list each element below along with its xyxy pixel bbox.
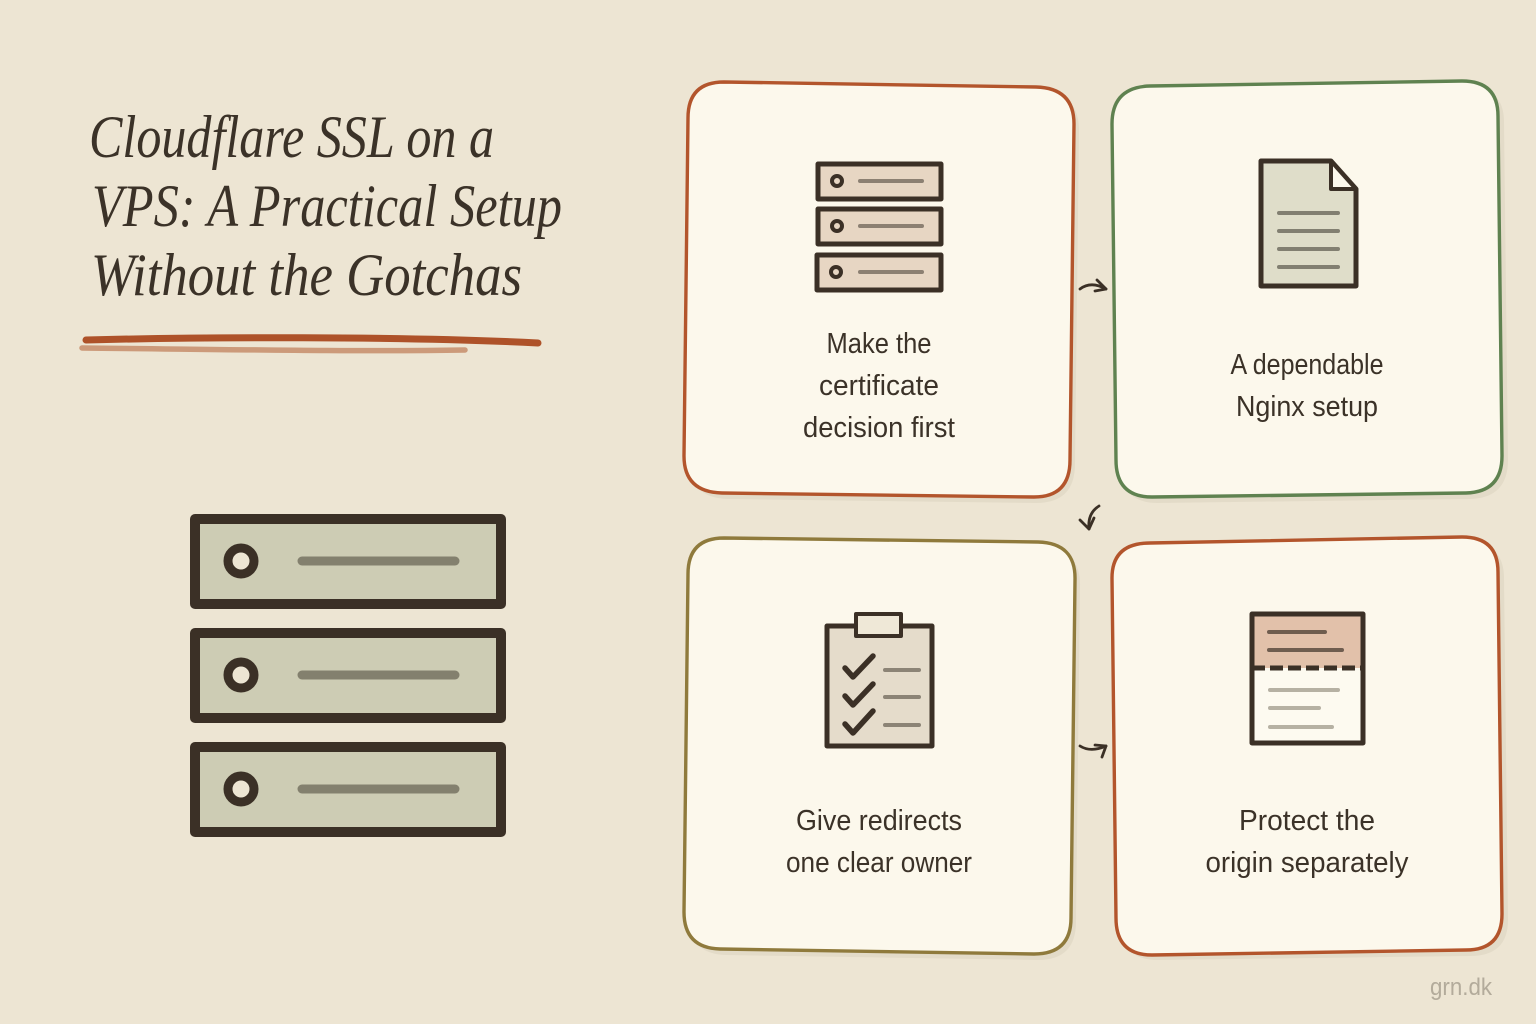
icon: large server rack xyxy=(195,519,501,832)
card text xyxy=(1230,349,1384,423)
watermark: grn.dk xyxy=(1430,974,1493,1001)
card text xyxy=(786,805,972,879)
card text: A dependable xyxy=(1230,349,1384,381)
panel: a dependable nginx setup xyxy=(1112,81,1508,503)
panel: protect the origin separately xyxy=(1112,537,1508,960)
title: Cloudflare SSL on a xyxy=(89,104,494,170)
card text: Give redirects xyxy=(796,805,962,837)
card text xyxy=(803,328,955,444)
card text: origin separately xyxy=(1206,847,1409,879)
icon: document xyxy=(1261,161,1356,286)
icon: clipboard checklist xyxy=(827,614,932,746)
card text: decision first xyxy=(803,412,955,444)
title xyxy=(89,104,562,308)
arrow: top row xyxy=(1080,280,1106,291)
server unit 3 xyxy=(195,747,501,832)
card text: one clear owner xyxy=(786,847,972,879)
panel: make the certificate decision first xyxy=(684,82,1079,503)
card text: certificate xyxy=(819,370,939,402)
card text xyxy=(1206,805,1409,879)
icon: server stack xyxy=(817,164,941,290)
server unit 1 xyxy=(195,519,501,604)
title: Without the Gotchas xyxy=(91,242,522,308)
arrow: down to second row xyxy=(1080,506,1099,529)
title underline xyxy=(82,338,538,351)
card text: Make the xyxy=(826,328,932,360)
card text: Protect the xyxy=(1239,805,1375,837)
icon: split document xyxy=(1252,614,1363,743)
title: VPS: A Practical Setup xyxy=(92,173,562,239)
card text: Nginx setup xyxy=(1236,391,1378,423)
arrow: bottom row xyxy=(1080,745,1106,757)
server unit 2 xyxy=(195,633,501,718)
panel: give redirects one clear owner xyxy=(684,538,1080,960)
